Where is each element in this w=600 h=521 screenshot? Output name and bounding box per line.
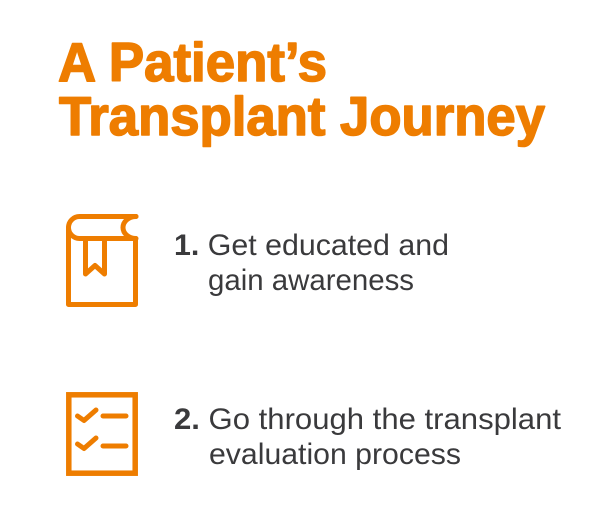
step 2 text: 2. Go through the transplant <box>174 403 562 436</box>
step 1 text <box>174 229 449 297</box>
step 2 text: evaluation process <box>209 438 461 471</box>
step 1 text: 1. Get educated and <box>174 229 449 262</box>
icon: book <box>68 216 136 304</box>
title <box>58 31 545 147</box>
step 1 text: gain awareness <box>208 264 414 297</box>
title: Transplant Journey <box>59 85 545 147</box>
icon: checklist <box>69 395 135 473</box>
step 2 text <box>174 403 562 471</box>
title: A Patient’s <box>58 31 327 93</box>
